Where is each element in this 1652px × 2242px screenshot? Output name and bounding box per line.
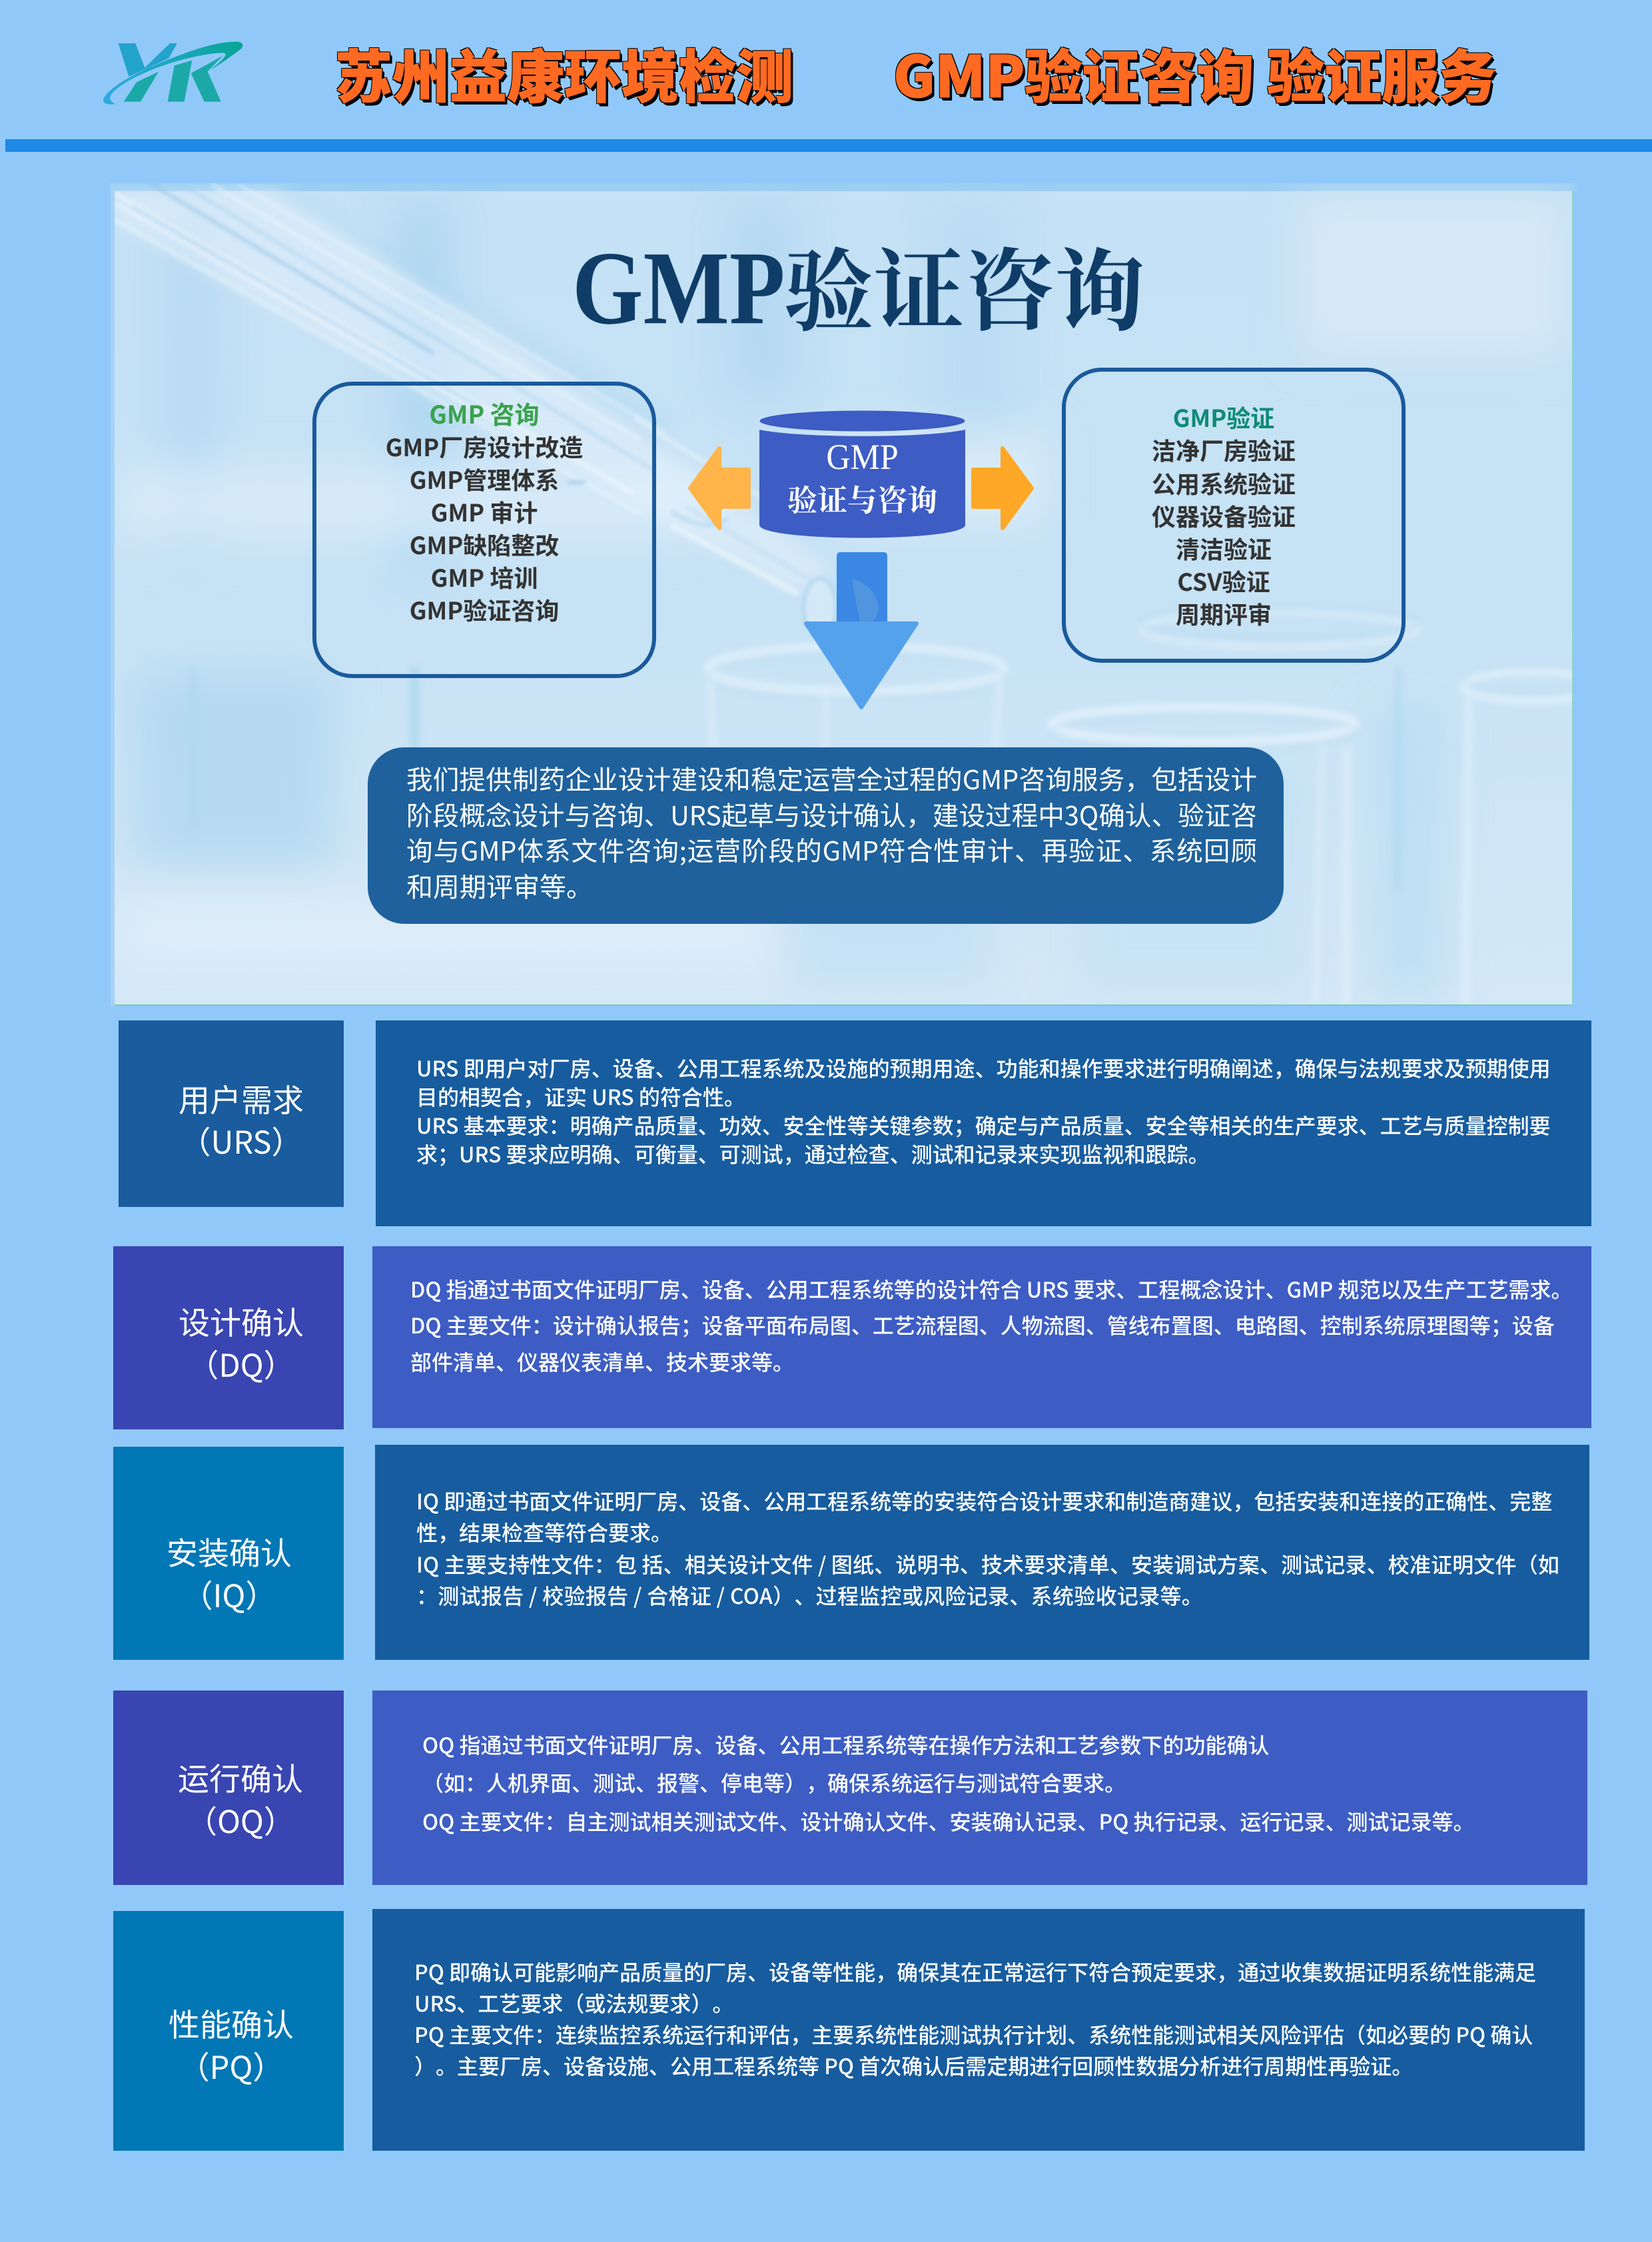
panel: IQ label: 安装确认	[167, 1528, 292, 1574]
panel: IQ description: ：测试报告 / 校验报告 / 合格证 / COA）、过程监控或风险记录、系统验收记录等。	[416, 1580, 1203, 1611]
panel: IQ label: （IQ）	[182, 1571, 276, 1617]
panel: URS label: （URS）	[179, 1117, 303, 1163]
panel: PQ description	[372, 1909, 1585, 2151]
panel: DQ label	[113, 1246, 344, 1429]
panel: PQ label: 性能确认	[169, 2000, 294, 2046]
panel: IQ description: IQ 即通过书面文件证明厂房、设备、公用工程系统等的安装符合设计要求和制造商建议，包括安装和连接的正确性、完整	[416, 1485, 1552, 1516]
list items: GMP缺陷整改	[410, 527, 559, 561]
panel: OQ description	[372, 1690, 1587, 1885]
panel: OQ description: （如：人机界面、测试、报警、停电等），确保系统运行与测试符合要求。	[422, 1767, 1126, 1798]
panel: PQ description: PQ 即确认可能影响产品质量的厂房、设备等性能，确保其在正常运行下符合预定要求，通过收集数据证明系统性能满足	[414, 1956, 1536, 1987]
hero laboratory background	[111, 183, 1577, 1006]
panel: PQ label: （PQ）	[179, 2042, 284, 2088]
list items: GMP厂房设计改造	[386, 429, 583, 464]
panel: DQ description	[372, 1246, 1591, 1428]
header band	[5, 31, 1652, 152]
panel: DQ description: DQ 主要文件：设计确认报告；设备平面布局图、工艺流程图、人物流图、管线布置图、电路图、控制系统原理图等；设备	[410, 1309, 1555, 1340]
panel: PQ description: URS、工艺要求（或法规要求）。	[414, 1988, 733, 2018]
panel: URS description: 目的相契合，证实 URS 的符合性。	[416, 1081, 745, 1112]
panel: URS description: 求；URS 要求应明确、可衡量、可测试，通过检查、测试和记录来实现监视和跟踪。	[416, 1138, 1210, 1169]
list items: CSV验证	[1177, 563, 1270, 598]
panel: OQ label	[113, 1690, 344, 1885]
icon: YK logo	[103, 41, 242, 105]
panel: PQ description: ）。主要厂房、设备设施、公用工程系统等 PQ 首次确认后需定期进行回顾性数据分析进行周期性再验证。	[414, 2050, 1413, 2081]
panel: DQ label: （DQ）	[187, 1340, 295, 1386]
panel: URS label: 用户需求	[179, 1075, 304, 1121]
main title: 验证咨询	[783, 219, 1144, 349]
panel: service description: 询与GMP体系文件咨询;运营阶段的GMP符合性审计、再验证、系统回顾	[406, 831, 1257, 869]
panel: IQ description: 性，结果检查等符合要求。	[416, 1517, 672, 1547]
cylinder text: 验证与咨询	[787, 476, 937, 520]
main title: GMP	[572, 230, 785, 346]
cylinder text: GMP	[826, 436, 899, 477]
list items: GMP 审计	[431, 494, 538, 529]
panel: PQ description: PQ 主要文件：连续监控系统运行和评估，主要系统性能测试执行计划、系统性能测试相关风险评估（如必要的 PQ 确认	[414, 2019, 1533, 2050]
glass pipette	[115, 183, 833, 594]
panel: DQ description: 部件清单、仪器仪表清单、技术要求等。	[410, 1346, 794, 1377]
list heading: GMP 咨询	[429, 395, 540, 431]
panel: URS description	[376, 1020, 1591, 1226]
panel: URS label	[119, 1020, 344, 1207]
heading: service name: GMP验证咨询 验证服务	[893, 31, 1496, 114]
panel: OQ description: OQ 主要文件：自主测试相关测试文件、设计确认文件、安装确认记录、PQ 执行记录、运行记录、测试记录等。	[422, 1806, 1475, 1836]
list items: GMP管理体系	[410, 462, 559, 496]
header rule	[5, 139, 1652, 152]
arrow: left	[688, 446, 751, 530]
panel: IQ description	[375, 1445, 1589, 1660]
list items: 清洁验证	[1176, 531, 1272, 565]
arrow: down	[804, 552, 919, 709]
list items: 周期评审	[1176, 596, 1272, 631]
list items: GMP验证咨询	[410, 592, 559, 627]
list items	[386, 429, 583, 627]
panel: OQ label: 运行确认	[178, 1754, 303, 1800]
list items	[1152, 432, 1296, 631]
panel: service description: 阶段概念设计与咨询、URS起草与设计确认，建设过程中3Q确认、验证咨	[406, 795, 1257, 833]
panel: OQ description: OQ 指通过书面文件证明厂房、设备、公用工程系统等在操作方法和工艺参数下的功能确认	[422, 1729, 1269, 1760]
list items: 公用系统验证	[1152, 466, 1296, 500]
arrow: right	[971, 446, 1034, 530]
beaker rims	[708, 646, 1004, 691]
panel: DQ description: DQ 指通过书面文件证明厂房、设备、公用工程系统等的设计符合 URS 要求、工程概念设计、GMP 规范以及生产工艺需求。	[410, 1274, 1572, 1304]
panel: hero	[111, 183, 1577, 1006]
panel: service description	[368, 747, 1284, 924]
list heading: GMP验证	[1173, 400, 1274, 434]
main title	[572, 219, 1144, 349]
panel: OQ label: （OQ）	[186, 1796, 295, 1842]
panel: GMP validation list	[1062, 368, 1406, 663]
icon: central database cylinder	[759, 410, 965, 538]
panel: IQ label	[113, 1447, 344, 1660]
panel: service description: 和周期评审等。	[406, 866, 593, 905]
list items: 洁净厂房验证	[1152, 432, 1296, 467]
cylinder text	[787, 436, 937, 520]
panel: GMP consulting list	[312, 382, 656, 678]
panel: service description: 我们提供制药企业设计建设和稳定运营全过程的GMP咨询服务，包括设计	[406, 759, 1257, 797]
panel: URS description: URS 即用户对厂房、设备、公用工程系统及设施的预期用途、功能和操作要求进行明确阐述，确保与法规要求及预期使用	[416, 1052, 1551, 1083]
heading: company name: 苏州益康环境检测	[335, 31, 793, 114]
panel: URS description: URS 基本要求：明确产品质量、功效、安全性等关键参数；确定与产品质量、安全等相关的生产要求、工艺与质量控制要	[416, 1110, 1551, 1140]
panel: PQ label	[113, 1911, 344, 2151]
panel: IQ description: IQ 主要支持性文件：包 括、相关设计文件 / 图纸、说明书、技术要求清单、安装调试方案、测试记录、校准证明文件（如	[416, 1549, 1559, 1579]
list items: 仪器设备验证	[1152, 498, 1296, 533]
list items: GMP 培训	[431, 560, 538, 594]
panel: DQ label: 设计确认	[179, 1298, 304, 1343]
